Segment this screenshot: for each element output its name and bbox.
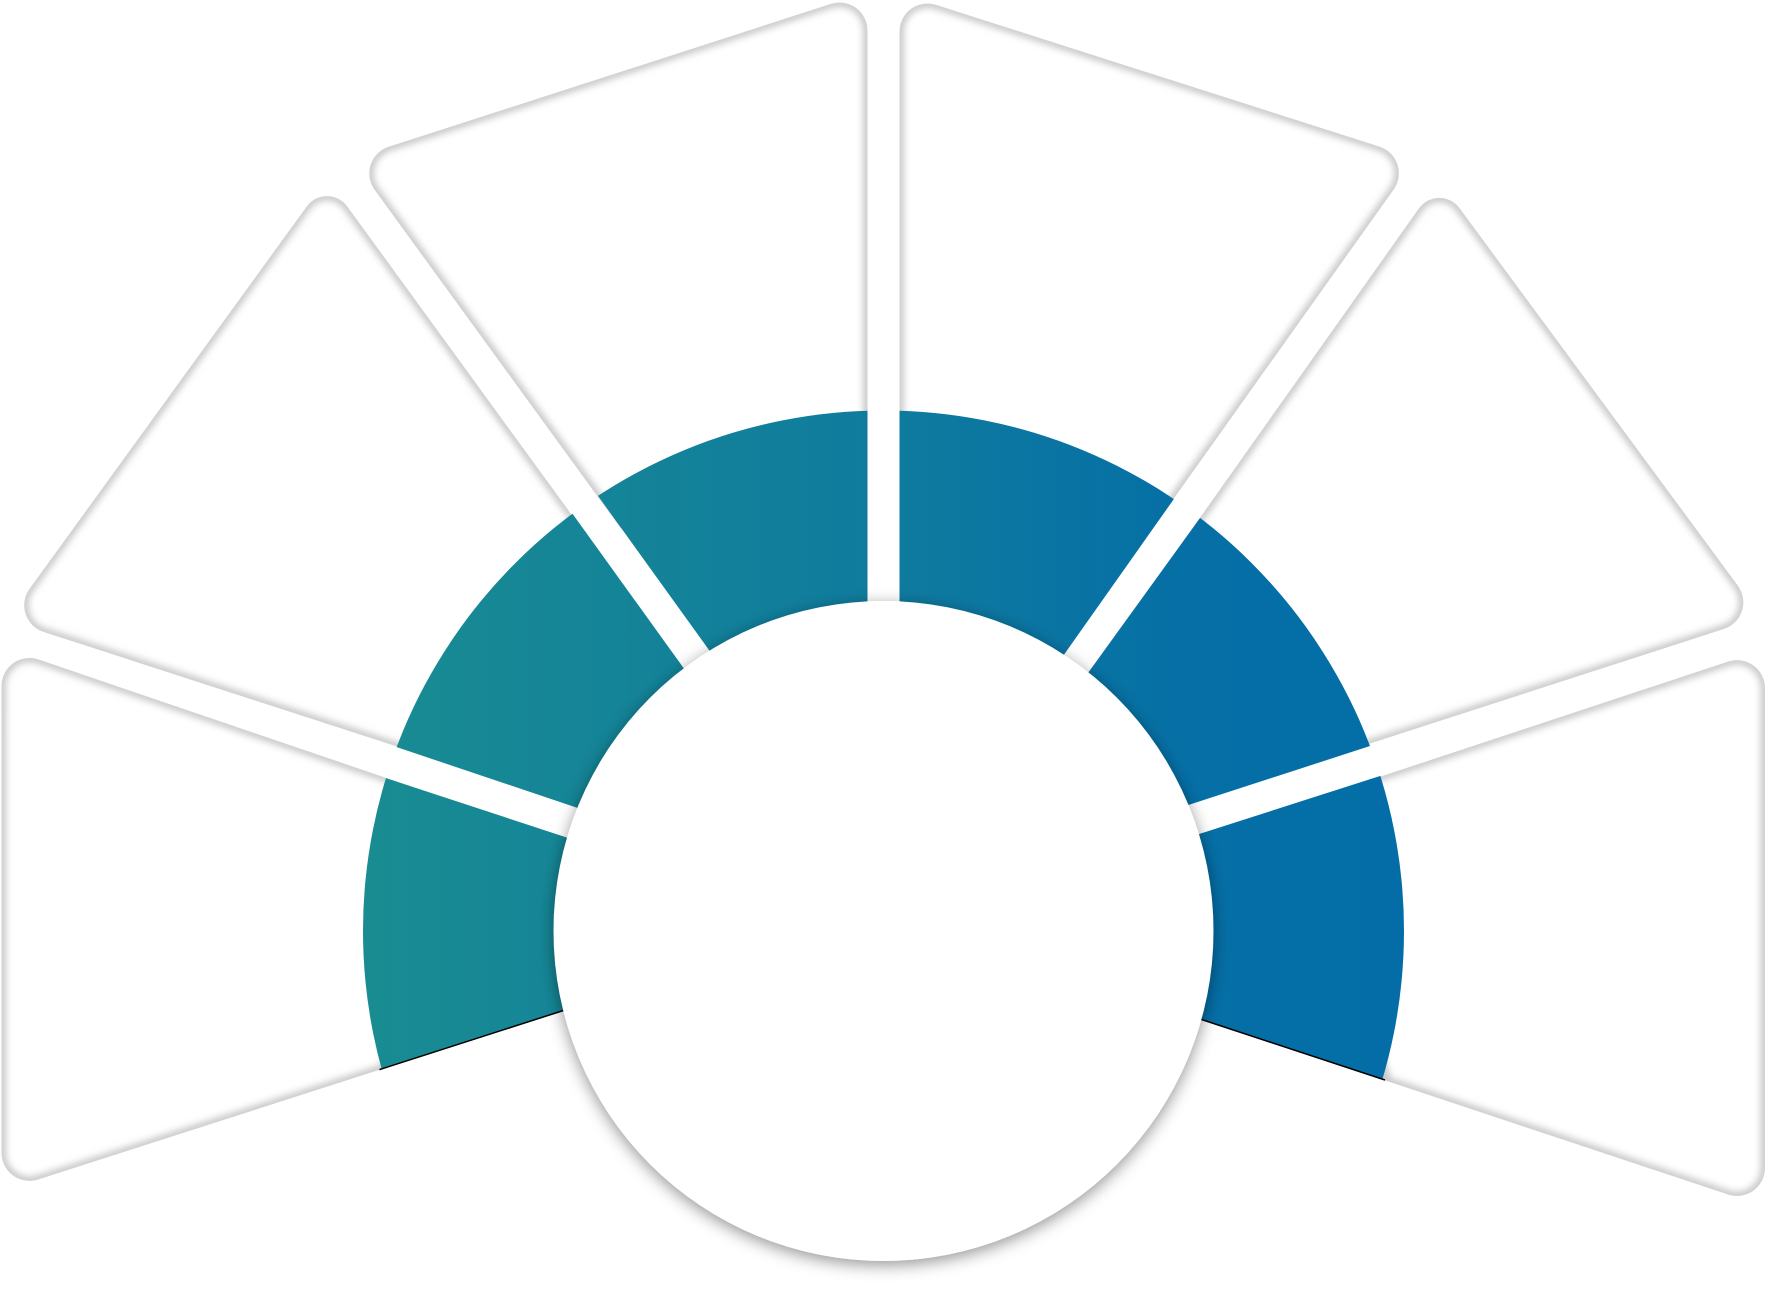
panel: lower left wedge — [2, 658, 410, 1181]
panel: top right wedge — [900, 4, 1399, 499]
black edge lines under the ring — [380, 1010, 1385, 1080]
ring segment 4 — [900, 410, 1174, 655]
gradient ring segments — [363, 410, 1404, 1078]
ring segment 6 — [1198, 776, 1404, 1078]
ring segment 5 — [1088, 518, 1370, 805]
panel: lower right wedge — [1380, 660, 1765, 1196]
center circle — [554, 601, 1214, 1261]
ring segment 3 — [598, 410, 868, 651]
panel: upper left wedge — [24, 196, 572, 746]
ring segment 2 — [396, 514, 684, 808]
panel: upper right wedge — [1186, 198, 1744, 744]
ring segment 1 — [363, 778, 567, 1068]
panel: top left wedge — [369, 2, 868, 528]
